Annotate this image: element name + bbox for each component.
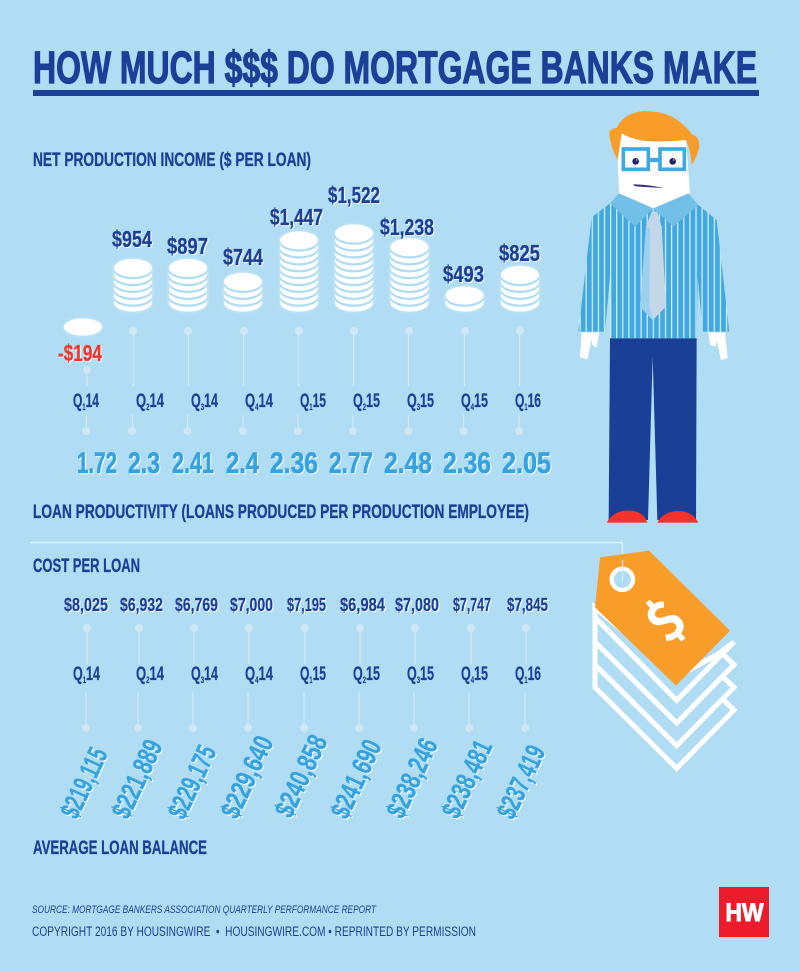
- cost values: $7,080: [395, 594, 439, 615]
- average loan balance values: $238,246: [380, 733, 444, 823]
- upper quarter labels: Q: [245, 391, 260, 412]
- productivity values: 2.05: [502, 447, 551, 480]
- upper quarter labels: 2: [146, 402, 150, 412]
- logo: HW: [719, 887, 769, 937]
- cost values: $7,747: [453, 594, 491, 615]
- lower quarter labels: [73, 664, 541, 685]
- illustration: man: [578, 111, 729, 523]
- upper quarter labels: Q: [136, 391, 151, 412]
- lower quarter labels: 14: [259, 664, 273, 685]
- cost values: [64, 594, 548, 615]
- cost values: $6,769: [175, 594, 218, 615]
- lower quarter labels: Q: [136, 664, 151, 685]
- left hand: [580, 332, 599, 359]
- average loan balance values: $238,481: [436, 735, 498, 823]
- average loan balance values: $241,690: [324, 735, 388, 823]
- tag hole: [612, 569, 633, 590]
- cost values: $8,025: [64, 594, 108, 615]
- productivity values: [77, 447, 551, 480]
- lower quarter labels: 15: [366, 664, 380, 685]
- average loan balance values: $229,640: [215, 731, 279, 823]
- upper quarter labels: Q: [515, 391, 530, 412]
- dollar sign on tag: $: [624, 578, 702, 657]
- heading: loan productivity: LOAN PRODUCTIVITY (LOANS PRODUCED PER PRODUCTION EMPLOYEE): [33, 501, 529, 523]
- shoes: [607, 510, 698, 523]
- productivity values: 2.4: [226, 447, 259, 480]
- net income values: $744: [223, 244, 263, 270]
- productivity values: 2.48: [384, 447, 432, 480]
- upper quarter labels: 1: [82, 402, 86, 412]
- upper quarter labels: 1: [309, 402, 313, 412]
- lower quarter labels: 14: [204, 664, 218, 685]
- average loan balance values: $240,858: [269, 730, 333, 822]
- coins: Q4 14: [224, 273, 262, 312]
- lower quarter labels: 14: [86, 664, 100, 685]
- upper quarter labels: 14: [259, 391, 273, 412]
- coins: Q1 16: [500, 266, 540, 312]
- lower quarter labels: Q: [353, 664, 368, 685]
- net income values: $1,238: [380, 214, 434, 240]
- productivity values: 2.36: [270, 447, 318, 480]
- upper connectors: [82, 327, 524, 435]
- tie: [640, 212, 666, 320]
- cost values: $7,195: [287, 594, 326, 615]
- orange tag: [595, 551, 730, 686]
- upper quarter labels: Q: [73, 391, 88, 412]
- productivity values: 2.41: [172, 447, 214, 480]
- copyright line: COPYRIGHT 2016 BY HOUSINGWIRE • HOUSINGWIRE.COM • REPRINTED BY PERMISSION: [32, 924, 476, 939]
- coin: Q1 14: [64, 318, 102, 336]
- lower quarter labels: 15: [474, 664, 488, 685]
- net income values: $897: [167, 233, 208, 259]
- upper quarter labels: Q: [300, 391, 315, 412]
- cost values: $7,000: [230, 594, 273, 615]
- average loan balance values: $221,889: [105, 735, 169, 823]
- upper quarter labels: 14: [204, 391, 218, 412]
- upper quarter labels: 4: [255, 402, 259, 412]
- average loan balance values: $229,175: [162, 741, 222, 823]
- right hand: [708, 332, 728, 360]
- upper quarter labels: [73, 391, 541, 412]
- net income values: -$194: [58, 340, 102, 366]
- lower quarter labels: Q: [191, 664, 206, 685]
- coins: Q2 15: [334, 224, 374, 312]
- upper quarter labels: 4: [471, 402, 474, 412]
- lower quarter labels: Q: [461, 664, 476, 685]
- upper quarter labels: Q: [353, 391, 368, 412]
- upper quarter labels: Q: [191, 391, 206, 412]
- lower quarter labels: 3: [201, 675, 204, 685]
- lower quarter labels: 15: [313, 664, 326, 685]
- lower quarter labels: 2: [146, 675, 150, 685]
- upper quarter labels: 1: [524, 402, 528, 412]
- net income values: $825: [499, 240, 540, 266]
- upper quarter labels: 15: [366, 391, 380, 412]
- productivity values: 2.77: [329, 447, 373, 480]
- upper quarter labels: 2: [363, 402, 366, 412]
- average loan balance values: [54, 730, 551, 823]
- lower quarter labels: 1: [309, 675, 313, 685]
- heading: average loan balance: AVERAGE LOAN BALANCE: [33, 837, 207, 859]
- string through hole: [622, 560, 624, 582]
- heading: cost per loan: COST PER LOAN: [33, 555, 140, 577]
- lower quarter labels: 3: [417, 675, 420, 685]
- shirt: [578, 203, 729, 338]
- upper quarter labels: Q: [461, 391, 476, 412]
- hair: [609, 111, 699, 165]
- man lower body: [580, 332, 728, 523]
- coins: Q3 15: [390, 238, 429, 312]
- productivity values: 1.72: [77, 447, 117, 480]
- lower quarter labels: 1: [524, 675, 528, 685]
- net income values: $1,522: [328, 182, 380, 208]
- lower quarter labels: 15: [420, 664, 434, 685]
- net income values: $954: [112, 226, 152, 252]
- upper quarter labels: 14: [86, 391, 99, 412]
- upper quarter labels: 15: [474, 391, 488, 412]
- upper quarter labels: 15: [420, 391, 434, 412]
- coins: Q3 14: [168, 259, 208, 312]
- man upper body: [578, 111, 729, 338]
- eyes: [632, 158, 676, 165]
- cost values: $6,984: [340, 594, 386, 615]
- average loan balance values: $219,115: [54, 743, 114, 823]
- cost values: $7,845: [507, 594, 548, 615]
- net income values: $1,447: [270, 204, 323, 230]
- upper quarter labels: 3: [201, 402, 204, 412]
- lower quarter labels: Q: [300, 664, 315, 685]
- lower quarter labels: 1: [83, 675, 86, 685]
- lower quarter labels: 16: [528, 664, 541, 685]
- productivity values: 2.3: [128, 447, 160, 480]
- coins: Q4 15: [445, 287, 484, 312]
- upper quarter labels: 3: [417, 402, 420, 412]
- lower quarter labels: 4: [255, 675, 259, 685]
- mouth: [633, 184, 664, 188]
- source note: SOURCE: MORTGAGE BANKERS ASSOCIATION QUARTERLY PERFORMANCE REPORT: [32, 904, 377, 916]
- lower quarter labels: Q: [515, 664, 530, 685]
- coins: Q1 15: [280, 231, 318, 312]
- lower quarter labels: Q: [407, 664, 422, 685]
- collar: [610, 193, 698, 227]
- lower quarter labels: Q: [245, 664, 260, 685]
- coin stacks chart: [64, 224, 540, 336]
- net income values: [58, 182, 540, 366]
- lower quarter labels: 4: [471, 675, 474, 685]
- coins: Q2 14: [114, 259, 152, 312]
- string line: [30, 542, 622, 560]
- upper quarter labels: 15: [313, 391, 326, 412]
- face: [618, 133, 690, 208]
- productivity values: 2.36: [443, 447, 491, 480]
- upper quarter labels: 14: [150, 391, 164, 412]
- paper stack: [595, 607, 734, 768]
- lower quarter labels: 14: [150, 664, 164, 685]
- lower quarter labels: Q: [73, 664, 88, 685]
- logo: HW: HW: [726, 899, 764, 927]
- glasses: [623, 149, 684, 169]
- upper quarter labels: 16: [528, 391, 541, 412]
- lower connectors: [82, 624, 530, 732]
- trousers: [609, 338, 697, 520]
- cost values: $6,932: [120, 594, 163, 615]
- net income values: $493: [443, 261, 484, 287]
- average loan balance values: $237,419: [491, 741, 551, 823]
- illustration: price tag stack: [30, 542, 734, 768]
- lower quarter labels: 2: [363, 675, 366, 685]
- upper quarter labels: Q: [407, 391, 422, 412]
- heading: net production income: NET PRODUCTION INCOME ($ PER LOAN): [33, 149, 311, 171]
